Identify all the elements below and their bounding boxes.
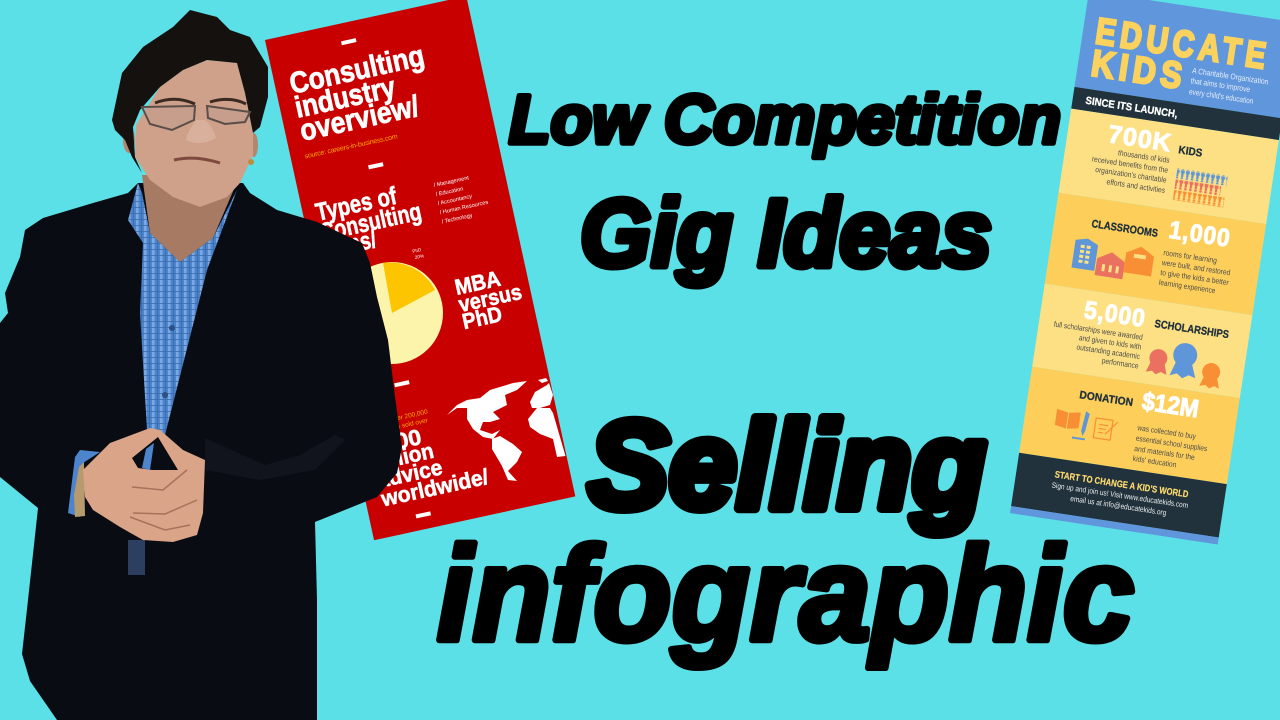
footer text <box>1049 469 1191 520</box>
heading: MBA versus PhD: versus <box>456 279 524 317</box>
small orange text: books sold over <box>383 417 429 434</box>
stat: 5,000 scholarships: SCHOLARSHIPS <box>1154 318 1230 341</box>
stat: 1,000 classrooms: 1,000 <box>1167 216 1233 253</box>
neck <box>142 175 240 262</box>
blazer <box>0 183 402 720</box>
heading: since its launch: SINCE ITS LAUNCH, <box>1085 95 1178 121</box>
heading: types of consulting firms: firms/ <box>321 225 379 264</box>
heading: MBA versus PhD: PhD <box>460 301 504 334</box>
heading: MBA versus PhD <box>452 262 528 334</box>
stat: $12M donation: and materials for the <box>1134 444 1195 462</box>
stat: 5,000 scholarships: outstanding academic <box>1076 343 1141 361</box>
pie label <box>412 247 424 260</box>
band: donation <box>1019 367 1240 484</box>
band: classrooms <box>1045 193 1266 315</box>
heading: consulting industry overview: industry <box>292 71 399 125</box>
stat: 700K kids <box>1088 118 1205 200</box>
panel: red consulting infographic <box>265 0 575 540</box>
divider dash middle <box>368 162 384 169</box>
stat: 1,000 classrooms <box>1084 204 1238 297</box>
subtitle: that aims to improve <box>1190 76 1251 94</box>
earring <box>248 159 254 165</box>
panel: educate kids infographic <box>1010 0 1280 544</box>
heading: worldwide advice: $200 <box>368 424 424 460</box>
header background <box>1074 0 1280 118</box>
stat: 5,000 scholarships: performance <box>1101 356 1139 371</box>
face <box>135 60 253 207</box>
heading: worldwide advice: advice <box>375 454 445 493</box>
list of consulting types: / Management <box>433 175 470 189</box>
stat: 700K kids: received benefits from the <box>1091 154 1169 175</box>
shirt buttons <box>162 325 175 398</box>
subtitle: every child's education <box>1188 87 1254 106</box>
band: scholarships <box>1032 284 1252 398</box>
footer text: START TO CHANGE A KID'S WORLD <box>1054 469 1189 500</box>
hair <box>112 10 268 173</box>
stat: 700K kids: efforts and activities <box>1106 177 1166 195</box>
footer text: email us at info@educatekids.org <box>1070 494 1167 517</box>
heading: consulting industry overview: overview/ <box>297 90 423 148</box>
list of consulting types <box>433 172 491 225</box>
icon: people rows <box>1173 168 1228 207</box>
heading: types of consulting firms: Types of <box>313 182 400 227</box>
stat: $12M donation: essential school supplies <box>1135 434 1208 453</box>
heading: types of consulting firms <box>313 177 428 264</box>
list of consulting types: / Accountancy <box>437 194 473 207</box>
heading: worldwide advice: worldwide/ <box>378 464 491 512</box>
finger lines <box>130 470 197 530</box>
band: kids <box>1058 109 1279 224</box>
small orange text: Over 200,000 <box>388 409 429 424</box>
band: since its launch <box>1071 87 1280 140</box>
shirt visible in gap <box>142 443 154 470</box>
subtitle <box>1188 66 1269 108</box>
stat: 5,000 scholarships: full scholarships were awarded <box>1053 320 1143 342</box>
stat: 1,000 classrooms: learning experience <box>1158 278 1216 295</box>
icon: notepad <box>1093 418 1118 441</box>
source line: source: careers-in-business.com <box>304 133 399 160</box>
stat: 1,000 classrooms: were built, and restored <box>1161 258 1231 277</box>
stat: 5,000 scholarships <box>1049 292 1231 383</box>
list of consulting types: / Technology <box>441 213 473 225</box>
shirt <box>128 183 237 470</box>
stat: 5,000 scholarships: 5,000 <box>1082 296 1148 333</box>
title: infographic: infographic <box>437 520 1134 669</box>
heading: worldwide advice: billion <box>371 438 436 475</box>
heading: consulting industry overview <box>287 39 438 148</box>
title: educate kids: KIDS <box>1089 42 1190 97</box>
stat: $12M donation: $12M <box>1140 387 1201 424</box>
icon: award ribbons <box>1145 338 1225 390</box>
icon: pen <box>1072 410 1090 441</box>
stat: 700K kids: 700K <box>1106 120 1174 158</box>
heading: consulting industry overview: Consulting <box>287 39 427 101</box>
divider dash top <box>341 38 357 45</box>
heading: types of consulting firms: Consulting <box>317 198 424 247</box>
title: gig ideas: Gig Ideas <box>580 180 992 287</box>
heading: worldwide advice <box>367 412 491 512</box>
nose <box>186 120 216 143</box>
title: selling: Selling <box>588 397 986 535</box>
lower shirt strip <box>128 540 145 575</box>
pie label: 20% <box>414 253 424 260</box>
shirt cuff <box>68 450 100 517</box>
icon: school buildings <box>1071 237 1155 283</box>
heading: MBA versus PhD: MBA <box>452 266 503 300</box>
pie label: PhD <box>412 247 422 254</box>
divider dash lower <box>394 380 410 387</box>
watch <box>74 462 85 517</box>
stat: 1,000 classrooms: CLASSROOMS <box>1091 218 1159 240</box>
footer text: Sign up and join us! Visit www.educatekids.com <box>1051 481 1189 510</box>
stat: 700K kids: KIDS <box>1178 144 1203 160</box>
small orange text <box>381 409 431 434</box>
mouth <box>174 158 220 163</box>
stat: $12M donation: kids' education <box>1132 454 1177 469</box>
sleeve fold highlight <box>205 435 345 480</box>
stat: 700K kids: thousands of kids <box>1117 148 1170 165</box>
left ear <box>123 127 135 153</box>
pie chart: MBA versus PhD <box>341 262 443 364</box>
world map <box>447 378 566 481</box>
divider dash bottom <box>416 511 431 518</box>
stat: 5,000 scholarships: and given to kids with <box>1078 333 1142 351</box>
stat: $12M donation: DONATION <box>1079 389 1134 409</box>
person: man in dark blazer <box>0 10 402 720</box>
right ear <box>250 133 258 157</box>
stat: 1,000 classrooms: to give the kids a better <box>1160 268 1230 287</box>
eyebrows <box>155 99 246 104</box>
glasses <box>142 106 250 130</box>
stat: $12M donation: was collected to buy <box>1136 423 1197 441</box>
footer blue strip <box>1010 506 1219 544</box>
band: footer <box>1011 453 1227 538</box>
gap between hands <box>132 437 178 470</box>
stat: 1,000 classrooms: rooms for learning <box>1163 248 1218 265</box>
title: low competition: Low Competition <box>509 81 1061 158</box>
hands <box>83 428 205 542</box>
stat: 700K kids: organization's charitable <box>1095 165 1167 185</box>
list of consulting types: / Human Resources <box>439 200 489 216</box>
icon: book <box>1054 409 1081 430</box>
list of consulting types: / Education <box>435 186 464 198</box>
stat: $12M donation <box>1071 378 1215 474</box>
